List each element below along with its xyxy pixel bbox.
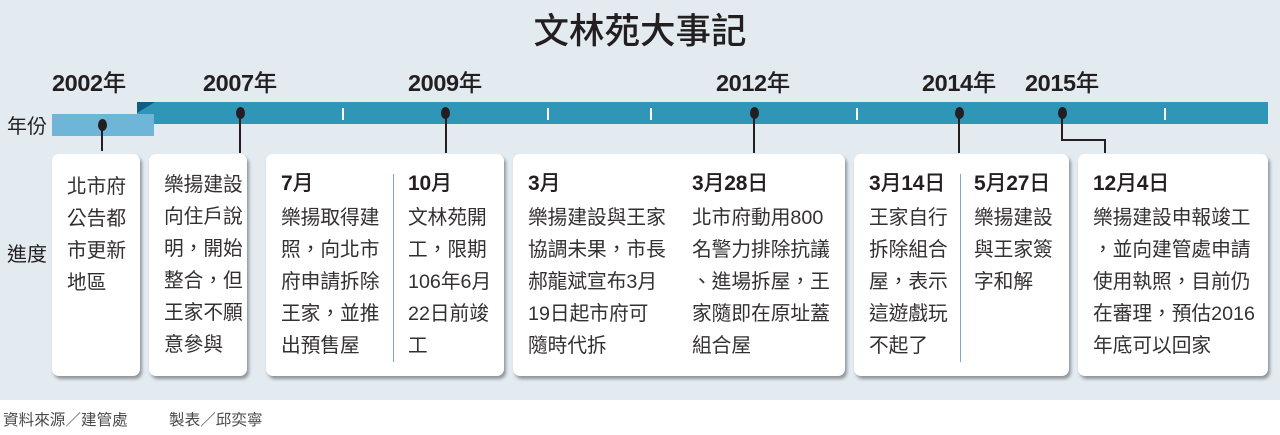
year labels: 2007年 (203, 70, 277, 96)
card: 2007: 向住戶說 (164, 206, 243, 228)
card: 2012: 協調未果，市長 (528, 239, 666, 261)
card: 2014: 與王家簽 (974, 239, 1053, 261)
start segment of timeline (52, 114, 154, 136)
card: 2009: 10月 (408, 172, 452, 195)
card: 2012: 、進場拆屋，王 (692, 271, 830, 293)
card: 2012: 3月28日 (692, 172, 768, 195)
card: 2012: 樂揚建設與王家 (528, 207, 666, 229)
card: 2007 (149, 154, 247, 376)
card: 2009: 22日前竣 (408, 303, 489, 325)
timeline ticks (342, 108, 1166, 120)
source credit: 資料來源／建管處 (3, 412, 128, 429)
card: 2007: 樂揚建設 (164, 174, 243, 196)
card: 2002: 市更新 (67, 240, 126, 262)
card: 2015: 12月4日 (1093, 172, 1169, 195)
timeline bar (137, 102, 1268, 124)
card: 2014: 3月14日 (869, 172, 945, 195)
year labels: 2009年 (408, 70, 482, 96)
year labels (52, 70, 1099, 96)
card: 2014: 這遊戲玩 (869, 303, 948, 325)
card: 2012: 隨時代拆 (528, 335, 607, 357)
year labels: 2015年 (1025, 70, 1099, 96)
card: 2009: 樂揚取得建 (281, 207, 379, 229)
title: 文林苑大事記 (533, 11, 746, 51)
year labels: 2014年 (922, 70, 996, 96)
year labels: 2012年 (716, 70, 790, 96)
row label: progress: 進度 (7, 244, 47, 266)
card: 2014: 字和解 (974, 271, 1033, 293)
year labels: 2002年 (52, 70, 126, 96)
card: 2009: 工，限期 (408, 239, 487, 261)
card: 2002: 北市府 (67, 176, 126, 198)
card: 2012: 19日起市府可 (528, 303, 648, 325)
card: 2009: 王家，並推 (281, 303, 379, 325)
card: 2015: 年底可以回家 (1093, 335, 1211, 357)
card: 2007: 整合，但 (164, 270, 243, 292)
card: 2012: 3月 (528, 172, 560, 195)
card: 2007: 王家不願 (164, 302, 243, 324)
fold corner (137, 102, 155, 113)
card: 2014 (854, 154, 1069, 376)
timeline markers and connectors (98, 107, 1106, 153)
card: 2014: 王家自行 (869, 207, 948, 229)
card: 2012 (513, 154, 845, 376)
author credit: 製表／邱奕寧 (169, 412, 263, 429)
card: 2015: 在審理，預估2016 (1093, 303, 1255, 325)
card: 2012: 北市府動用800 (692, 207, 823, 229)
card: 2014: 5月27日 (974, 172, 1050, 195)
card: 2009: 出預售屋 (281, 335, 360, 357)
card: 2009: 府申請拆除 (281, 271, 379, 293)
card: 2009 (266, 154, 504, 376)
card: 2009: 工 (408, 335, 428, 357)
card: 2014: 樂揚建設 (974, 207, 1053, 229)
card: 2012: 組合屋 (692, 335, 751, 357)
card: 2009: 文林苑開 (408, 207, 487, 229)
card: 2015: ，並向建管處申請 (1093, 239, 1250, 261)
card: 2012: 郝龍斌宣布3月 (528, 271, 657, 293)
card: 2002 (52, 154, 140, 376)
card: 2009: 7月 (281, 172, 313, 195)
card: 2002: 公告都 (67, 208, 126, 230)
card: 2015 (1078, 154, 1268, 376)
card: 2002: 地區 (67, 272, 106, 294)
card: 2007: 意參與 (164, 334, 223, 356)
card: 2012: 名警力排除抗議 (692, 239, 830, 261)
card: 2007: 明，開始 (164, 238, 243, 260)
card: 2015: 樂揚建設申報竣工 (1093, 207, 1250, 229)
card: 2012: 家隨即在原址蓋 (692, 303, 830, 325)
card: 2009: 照，向北市 (281, 239, 379, 261)
card: 2014: 拆除組合 (869, 239, 948, 261)
card: 2014: 屋，表示 (869, 271, 948, 293)
card: 2014: 不起了 (869, 335, 928, 357)
row label: year: 年份 (7, 116, 47, 138)
card: 2009: 106年6月 (408, 271, 491, 293)
card: 2015: 使用執照，目前仍 (1093, 271, 1250, 293)
